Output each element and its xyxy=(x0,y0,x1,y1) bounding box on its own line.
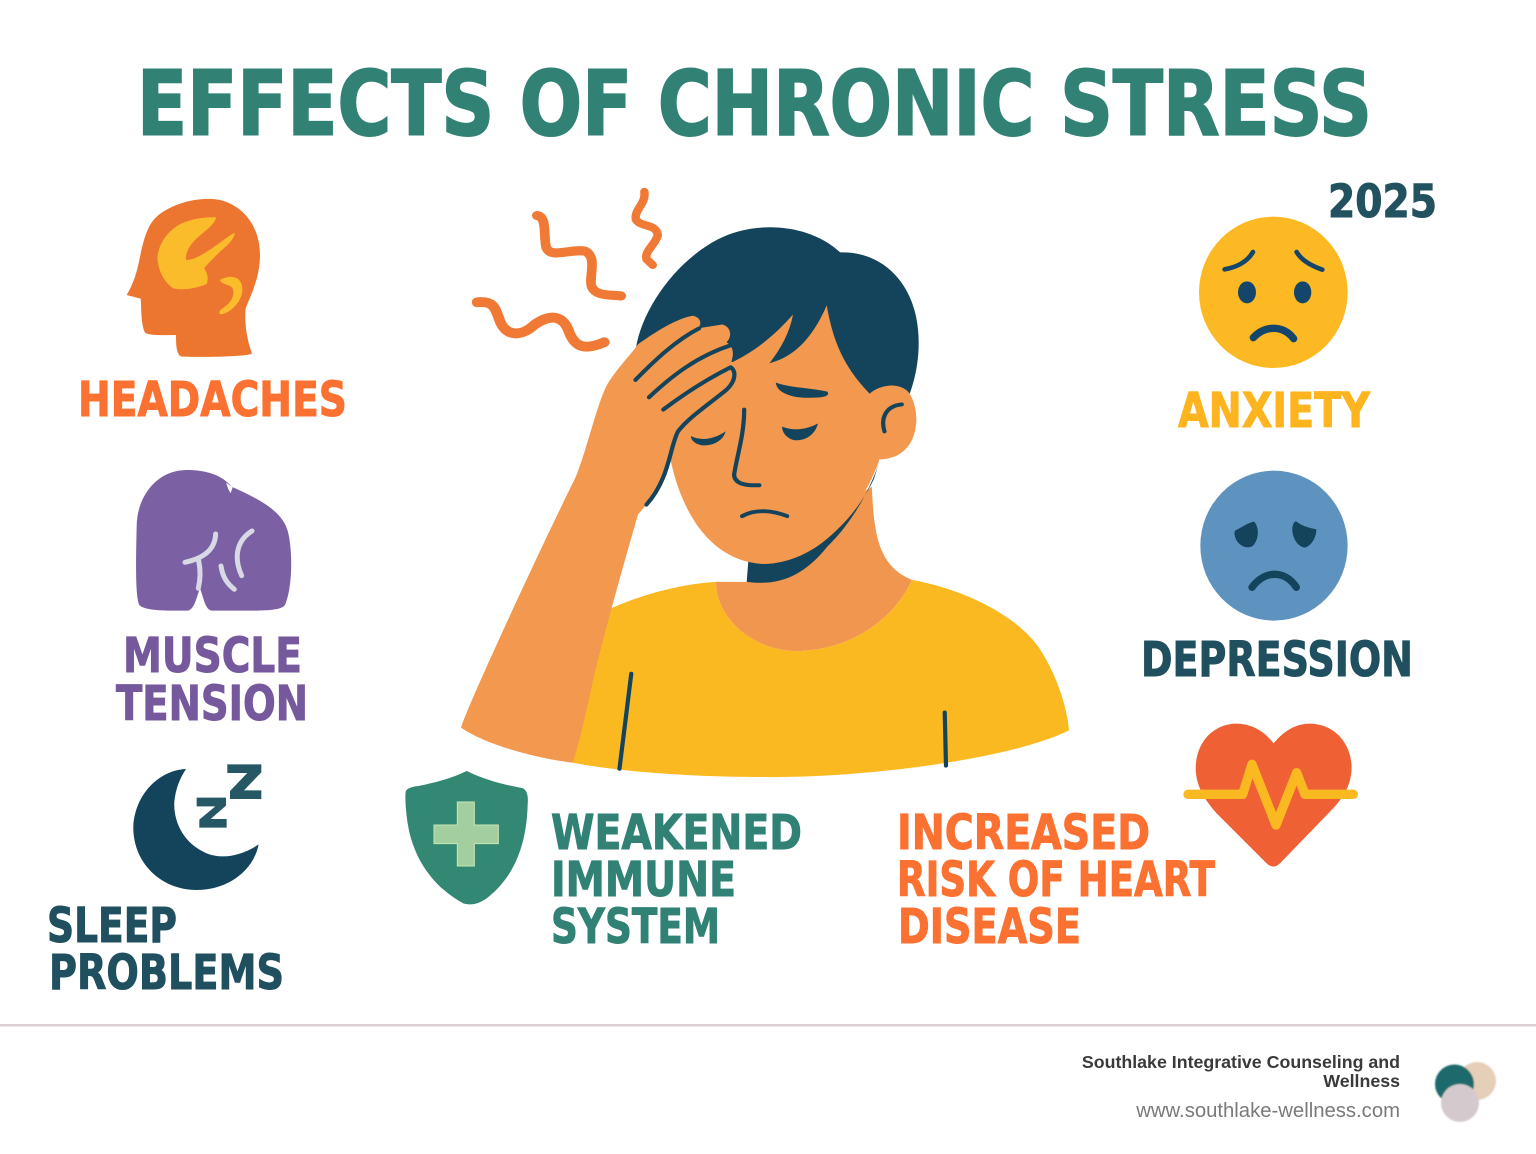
icon: back muscles xyxy=(136,470,291,611)
icon: sad face xyxy=(1200,471,1348,621)
label: sleep problems: PROBLEMS xyxy=(49,945,284,1001)
footer organisation name: Wellness xyxy=(1323,1071,1400,1091)
footer website: www.southlake-wellness.com xyxy=(1135,1100,1400,1122)
eyebrow xyxy=(776,383,828,398)
footer xyxy=(0,1024,1536,1122)
footer logo xyxy=(1435,1062,1496,1122)
label: muscle tension xyxy=(116,628,308,732)
label: anxiety: ANXIETY xyxy=(1178,383,1371,439)
hair xyxy=(636,227,919,394)
raised arm and hand xyxy=(461,316,734,763)
label: heart disease risk: RISK OF HEART xyxy=(897,852,1215,908)
label: weakened immune system: WEAKENED xyxy=(551,805,802,861)
icon: shield xyxy=(405,771,528,904)
panel: sleep problems xyxy=(47,764,284,1001)
neck shadow xyxy=(747,460,880,583)
closed eyes xyxy=(782,423,818,440)
panel: muscle tension xyxy=(116,470,308,732)
shirt xyxy=(573,580,1069,777)
face and hand line details xyxy=(619,328,946,769)
footer organisation name xyxy=(1082,1052,1400,1091)
stress squiggles xyxy=(477,192,658,347)
illustration: stressed person xyxy=(461,192,1069,777)
panel: increased risk of heart disease xyxy=(897,724,1353,955)
neck xyxy=(716,487,912,651)
label: heart disease risk: INCREASED xyxy=(897,805,1150,861)
label: sleep problems xyxy=(47,898,284,1001)
label: sleep problems: SLEEP xyxy=(47,898,177,954)
face xyxy=(670,289,879,564)
label: muscle tension: TENSION xyxy=(116,676,308,732)
label: heart disease risk: DISEASE xyxy=(898,899,1081,955)
panel: weakened immune system xyxy=(405,771,802,955)
icon: worried face xyxy=(1199,217,1348,368)
icon: head xyxy=(127,199,260,357)
label: depression: DEPRESSION xyxy=(1141,632,1413,688)
ear xyxy=(870,385,916,460)
label: weakened immune system xyxy=(551,805,802,955)
label: weakened immune system: SYSTEM xyxy=(551,899,720,955)
icon: heart with pulse xyxy=(1188,724,1353,867)
year label: 2025 xyxy=(1328,175,1437,228)
panel: anxiety xyxy=(1178,217,1371,439)
label: headaches: HEADACHES xyxy=(78,372,347,428)
panel: headaches xyxy=(78,199,347,428)
icon: moon and z letters xyxy=(133,764,261,890)
label: weakened immune system: IMMUNE xyxy=(551,852,736,908)
panel: depression xyxy=(1141,471,1413,688)
footer organisation name: Southlake Integrative Counseling and xyxy=(1082,1052,1400,1072)
label: heart disease risk xyxy=(897,805,1215,955)
label: muscle tension: MUSCLE xyxy=(123,628,302,684)
